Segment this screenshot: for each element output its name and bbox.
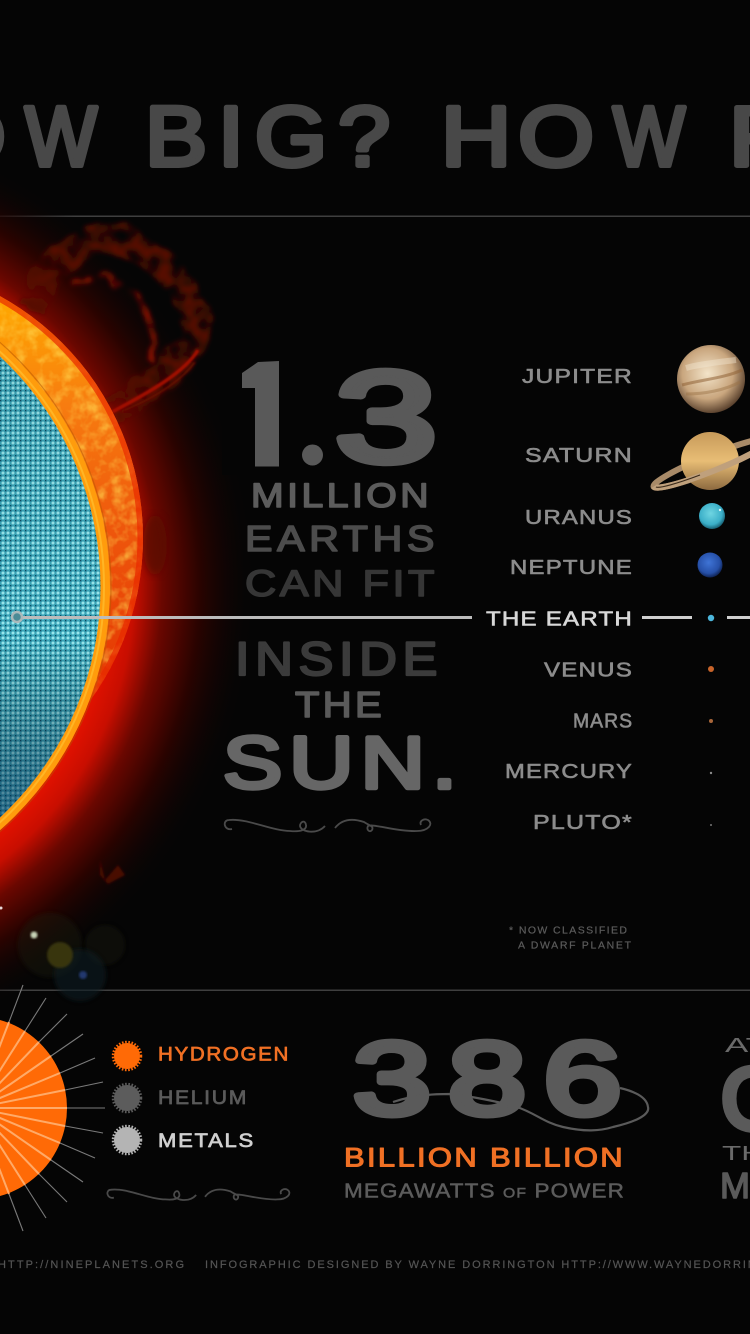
planet: pluto (710, 824, 712, 826)
stat: cropped right column (720, 1035, 750, 1206)
blue dotted core (0, 272, 100, 902)
planet labels: THE EARTH (486, 608, 633, 630)
planet labels: VENUS (544, 660, 633, 682)
digit 1: 1 (229, 342, 304, 491)
swirl (393, 1088, 648, 1130)
planet labels: MERCURY (505, 761, 633, 783)
burst rays outside disc (9, 985, 105, 1231)
stat: 386 billion billion megawatts (344, 1021, 648, 1202)
legend (113, 1042, 290, 1154)
footer credits: HTTP://NINEPLANETS.ORG (0, 1259, 184, 1271)
legend: hydrogen: HYDROGEN (158, 1044, 290, 1066)
title: HO (441, 90, 601, 184)
planet: saturn (651, 432, 750, 494)
earths: EARTHS (245, 518, 439, 559)
planet labels: MARS (573, 710, 633, 732)
planet labels: SATURN (525, 445, 633, 467)
number 386: 386 (353, 1021, 639, 1136)
scale line (12, 612, 750, 622)
chart: sun composition burst (0, 985, 105, 1231)
flourish under legend (107, 1189, 289, 1200)
planet labels: JUPITER (522, 366, 633, 388)
inside: INSIDE (235, 632, 443, 685)
megawatts of power: MEGAWATTS OF POWER (344, 1180, 625, 1202)
title: W (613, 90, 685, 184)
title: W (25, 90, 97, 184)
title (0, 90, 750, 184)
legend: metals: METALS (158, 1131, 255, 1152)
planet labels: URANUS (525, 507, 633, 529)
title: BIG? (145, 90, 401, 184)
digit 3: 3 (335, 346, 437, 489)
the: THE (295, 684, 385, 725)
flare patch right of limb (143, 515, 167, 575)
stat: cropped right column: M (720, 1165, 750, 1206)
million: MILLION (251, 477, 432, 515)
burst rays inside disc (0, 1022, 67, 1194)
photosphere band (0, 296, 143, 702)
can fit: CAN FIT (245, 563, 438, 604)
flourish under headline (225, 819, 430, 832)
sun: SUN. (223, 723, 464, 804)
planet: jupiter (677, 345, 745, 413)
illustration: the sun (0, 199, 230, 991)
lens flare (0, 860, 125, 1001)
footnote: A DWARF PLANET (518, 940, 632, 952)
planet: neptune (698, 552, 722, 578)
planet: mercury (710, 772, 712, 774)
planet labels: PLUTO* (533, 812, 633, 834)
legend: hydrogen (113, 1042, 290, 1070)
planet: uranus (699, 503, 725, 529)
stat: cropped right column: TH (722, 1143, 750, 1165)
stat: cropped right column: AT (725, 1035, 750, 1057)
footnote: * NOW CLASSIFIED (509, 924, 627, 936)
decimal point (302, 444, 323, 466)
billion billion: BILLION BILLION (344, 1142, 625, 1172)
orange ring (0, 263, 110, 911)
planet: venus (708, 666, 714, 672)
planet labels: NEPTUNE (510, 557, 633, 579)
planet labels (486, 366, 633, 834)
planet: mars (709, 719, 713, 723)
solar prominence (30, 238, 198, 412)
headline: 1.3 million earths can fit inside the sun (222, 342, 464, 804)
footnote (509, 924, 632, 952)
legend: helium: HELIUM (158, 1088, 248, 1109)
planet: earth (708, 615, 714, 621)
legend: metals (113, 1126, 255, 1154)
legend: helium (113, 1084, 248, 1112)
